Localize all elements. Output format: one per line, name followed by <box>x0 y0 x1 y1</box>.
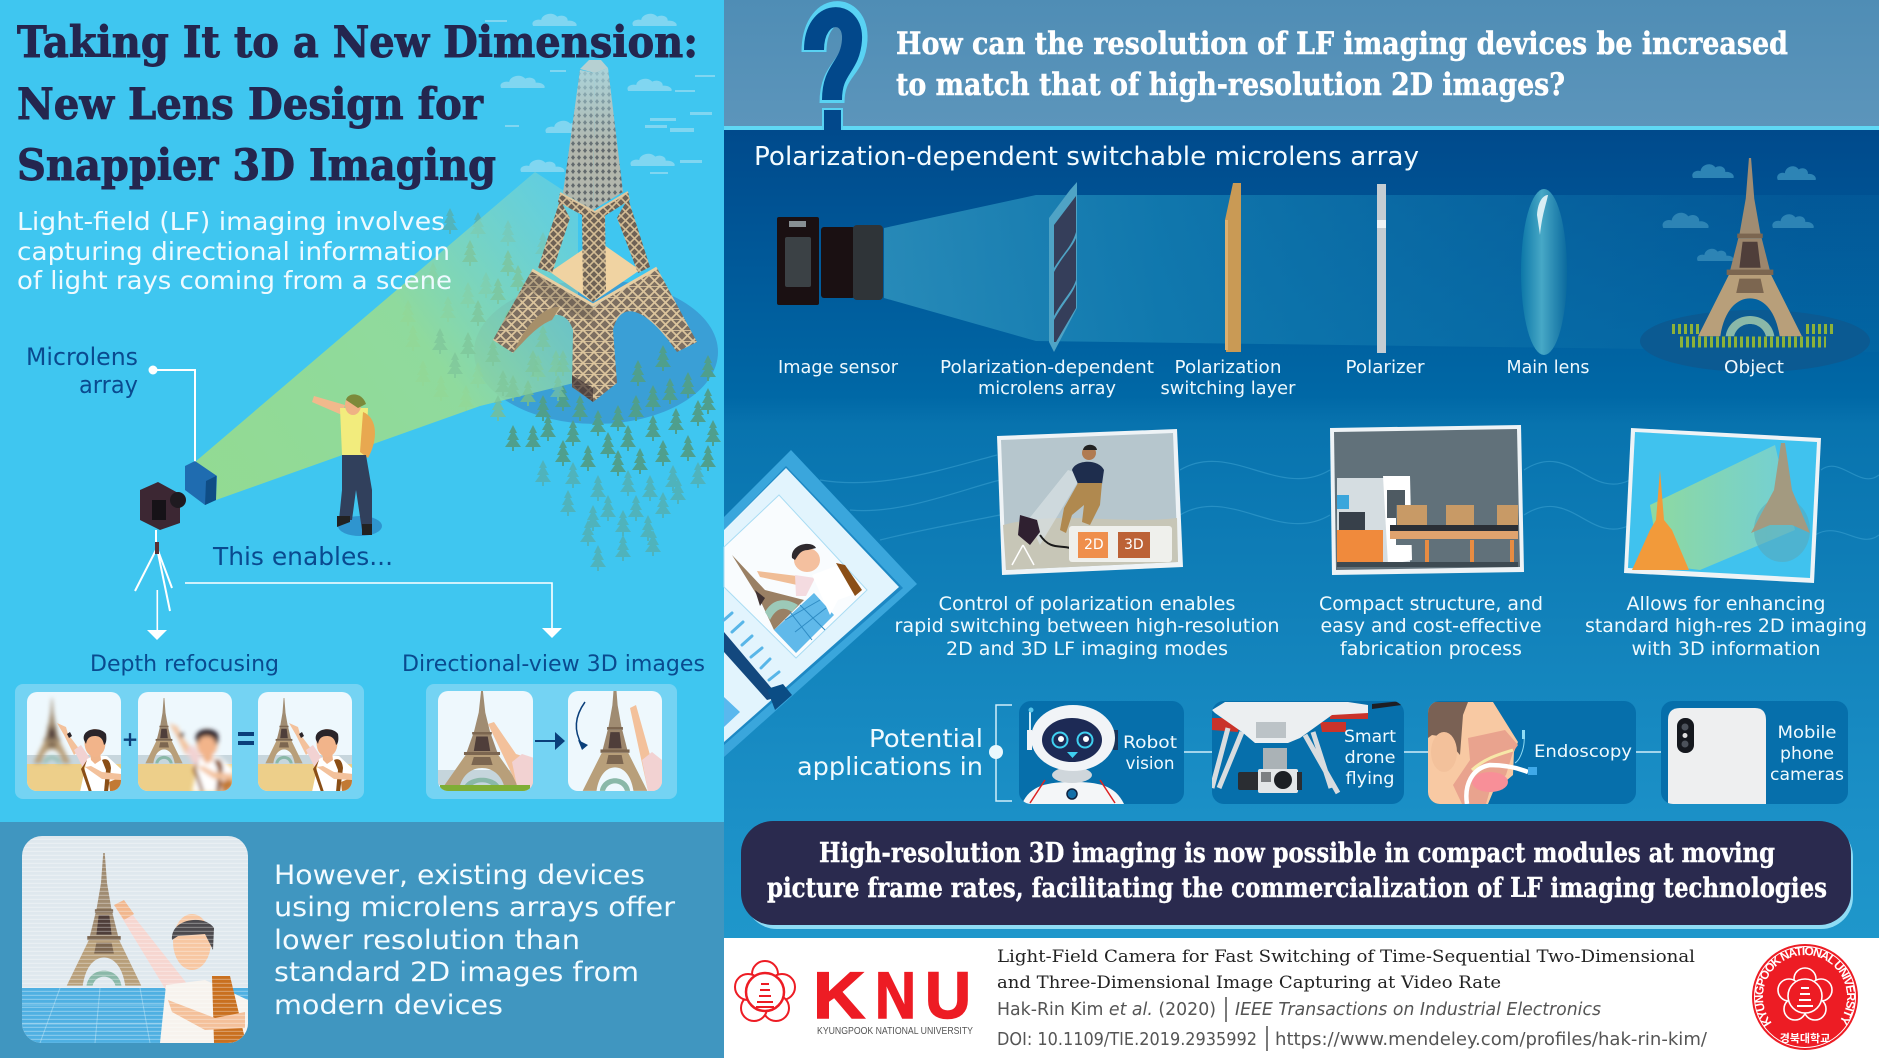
label: smart drone flying <box>1344 727 1396 789</box>
panel: left background <box>0 0 724 822</box>
scene shadow disc <box>474 280 718 424</box>
caption: compact structure <box>1319 593 1543 660</box>
caption: enhancing 2D: with 3D information <box>1632 638 1820 660</box>
icon: microlens array block <box>185 461 217 505</box>
text: limitation <box>274 860 676 1021</box>
component labels: Polarizer <box>1346 357 1425 378</box>
label: smart drone flying: flying <box>1346 769 1394 789</box>
panel: question band <box>724 0 1879 130</box>
caption: rapid switching: Control of polarization enables <box>938 593 1236 615</box>
intro text <box>17 207 452 295</box>
light beam <box>195 172 578 500</box>
label: robot vision <box>1123 733 1177 774</box>
question heading: to match that of high-resolution 2D images? <box>896 67 1565 103</box>
citation <box>997 947 1707 1051</box>
icon: main lens <box>1521 189 1567 355</box>
card: 3D enhancement photo <box>1624 428 1821 583</box>
title: Snappier 3D Imaging <box>17 141 496 191</box>
icon: robot <box>1022 705 1124 804</box>
component labels <box>778 357 1784 399</box>
image: all in focus <box>258 692 353 792</box>
text: This enables: This enables... <box>212 542 393 571</box>
seal: Kyungpook National University: KYUNGPOOK NATIONAL UNIVERSITY <box>1755 947 1855 1027</box>
heading: potential applications <box>797 724 983 781</box>
labels: 2D 3D: 2D <box>1084 537 1104 553</box>
intro text: capturing directional information <box>17 237 450 266</box>
icon: camera on tripod <box>135 482 186 611</box>
caption: rapid switching: rapid switching between high-resolution <box>894 615 1280 637</box>
citation: Hak-Rin Kim et al. (2020) <box>997 1000 1216 1020</box>
trees around tower <box>505 345 721 476</box>
logo: KNU wordmark: K <box>813 958 865 1032</box>
card: smart drone <box>1212 701 1404 804</box>
intro text: Light-field (LF) imaging involves <box>17 207 445 236</box>
title: New Lens Design for <box>17 80 484 130</box>
component labels: microlens array <box>978 378 1116 399</box>
text: limitation: using microlens arrays offer <box>274 892 676 923</box>
citation: https://www.mendeley.com/profiles/hak-rin-kim/ <box>1275 1030 1707 1050</box>
label: mobile phone cameras: phone <box>1780 744 1834 764</box>
arrow: to depth refocusing <box>147 590 167 640</box>
image: person blurred <box>138 692 233 792</box>
logo: KNU wordmark <box>813 958 973 1037</box>
caption: enhancing 2D: standard high-res 2D imaging <box>1585 615 1867 637</box>
faded trees in foreground <box>535 460 706 571</box>
card: mobile phone cameras <box>1661 701 1848 804</box>
icon: polarizer <box>1377 184 1386 353</box>
label: Microlens array: array <box>79 371 138 399</box>
label: robot vision: vision <box>1126 754 1174 774</box>
arrow: between views <box>535 732 565 750</box>
icon: phone <box>1668 708 1766 804</box>
caption: enhancing 2D: Allows for enhancing <box>1626 593 1826 615</box>
label: smart drone flying: drone <box>1344 748 1396 768</box>
component labels: Polarization <box>1174 357 1282 378</box>
symbol: plus: + <box>122 727 138 751</box>
component labels: Polarization-dependent <box>940 357 1154 378</box>
labels: 2D 3D: 3D <box>1124 537 1144 553</box>
label: Microlens array: Microlens <box>26 343 138 371</box>
seal: Kyungpook National University: 경북대학교 <box>1780 1031 1830 1045</box>
citation: and Three-Dimensional Image Capturing at Video Rate <box>997 973 1501 993</box>
citation: IEEE Transactions on Industrial Electronics <box>1235 1000 1601 1020</box>
panel: directional view images <box>426 680 677 799</box>
label: Microlens array <box>26 343 138 399</box>
image: low-resolution photo <box>22 836 248 1043</box>
background waves <box>820 455 1879 540</box>
label: smart drone flying: Smart <box>1344 727 1396 747</box>
heading: Depth refocusing: Depth refocusing <box>90 652 279 677</box>
logo: KNU wordmark: KYUNGPOOK NATIONAL UNIVERSITY <box>817 1026 973 1037</box>
icon: question mark <box>814 14 855 130</box>
citation: DOI: 10.1109/TIE.2019.2935992 <box>997 1030 1257 1050</box>
leader line <box>150 366 195 463</box>
component labels: Main lens <box>1506 357 1590 378</box>
caption: compact structure: fabrication process <box>1340 638 1522 660</box>
section heading: Polarization-dependent switchable microlens array <box>754 142 1419 172</box>
heading: potential applications: applications in <box>797 752 983 781</box>
caption: compact structure: easy and cost-effective <box>1320 615 1542 637</box>
question heading <box>896 26 1788 103</box>
illustration: notebook <box>724 450 917 757</box>
trees in beam <box>432 240 571 421</box>
icon: microlens array plate <box>1049 182 1077 352</box>
image: view one <box>438 690 534 791</box>
arrow: to directional view <box>185 583 562 638</box>
panel: right background <box>724 130 1879 938</box>
footer background <box>724 938 1879 1058</box>
component labels: Image sensor <box>778 357 899 378</box>
panel: limitation band <box>0 822 724 1058</box>
intro text: of light rays coming from a scene <box>17 266 452 295</box>
image: view two <box>568 680 662 791</box>
component labels: switching layer <box>1160 378 1296 399</box>
clouds <box>485 14 715 174</box>
component labels: Object <box>1724 357 1784 378</box>
title: Taking It to a New Dimension: <box>17 18 698 68</box>
icon: KNU emblem <box>735 961 795 1021</box>
citation: Light-Field Camera for Fast Switching of Time-Sequential Two-Dimensional <box>997 947 1695 967</box>
symbol: equals <box>238 732 254 745</box>
label: robot vision: Robot <box>1123 733 1177 753</box>
card: compact structure photo <box>1330 425 1524 575</box>
card: robot vision <box>1019 701 1184 804</box>
icon: head cross-section <box>1428 702 1537 804</box>
caption: enhancing 2D <box>1585 593 1867 660</box>
card: endoscopy <box>1428 701 1636 804</box>
label: mobile phone cameras: cameras <box>1770 765 1844 785</box>
text: limitation: lower resolution than <box>274 925 580 956</box>
bracket with connector <box>989 705 1661 801</box>
heading: Directional-view 3D images: Directional-view 3D images <box>402 652 705 677</box>
caption: rapid switching: 2D and 3D LF imaging modes <box>946 638 1228 660</box>
label: mobile phone cameras <box>1770 723 1844 785</box>
labels: 2D 3D <box>1084 537 1144 553</box>
logo: KNU wordmark: U <box>925 958 971 1032</box>
icon: polarization switching layer <box>1225 183 1241 352</box>
caption: compact structure: Compact structure, and <box>1319 593 1543 615</box>
logo: KNU wordmark: N <box>875 958 916 1032</box>
icon: image sensor camera <box>777 217 883 305</box>
caption: rapid switching <box>894 593 1280 660</box>
trees behind beam <box>400 208 551 421</box>
label: endoscopy: Endoscopy <box>1534 742 1632 762</box>
title <box>17 18 698 191</box>
callout: conclusion <box>741 821 1853 929</box>
text: limitation: standard 2D images from <box>274 957 639 988</box>
icon: drone <box>1212 701 1402 793</box>
light path beam <box>884 195 1879 352</box>
heading: potential applications: Potential <box>869 724 983 753</box>
text: limitation: However, existing devices <box>274 860 645 891</box>
text: limitation: modern devices <box>274 990 503 1021</box>
panel: depth refocusing images <box>15 684 364 799</box>
illustration: object Eiffel Tower <box>1640 158 1870 372</box>
image: tower blurred <box>27 692 121 792</box>
card: 2D 3D switching photo <box>997 429 1183 575</box>
label: mobile phone cameras: Mobile <box>1778 723 1836 743</box>
illustration: Eiffel Tower <box>493 60 697 402</box>
illustration: person pointing <box>312 394 382 536</box>
